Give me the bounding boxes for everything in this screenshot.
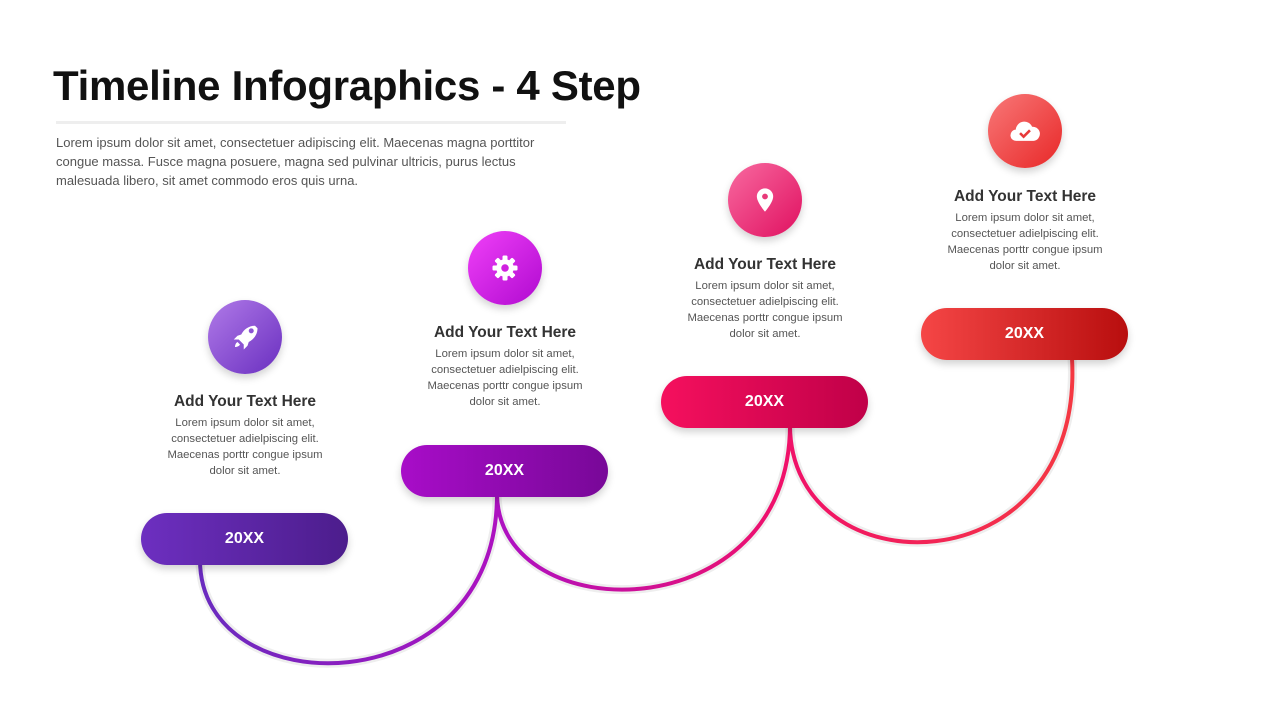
text: step 2: Add Your Text Here xyxy=(434,324,576,341)
intro paragraph: Lorem ipsum dolor sit amet, consectetuer adipiscing elit. Maecenas magna porttitor congue massa. Fusce magna posuere, magna sed pulvinar ultricis, purus lectus malesuada libero, sit amet commodo eros quis urna. xyxy=(56,135,534,188)
pill: step 4: 20XX xyxy=(1005,325,1044,342)
pill: step 1: 20XX xyxy=(225,530,264,547)
icon: gear xyxy=(468,231,542,305)
pill: step 3: 20XX xyxy=(745,393,784,410)
text: step 1: Add Your Text Here xyxy=(174,393,316,410)
text: step 4: Add Your Text Here xyxy=(954,188,1096,205)
pill: step 2 xyxy=(401,445,608,497)
icon: rocket xyxy=(208,300,282,374)
icon: location pin xyxy=(728,163,802,237)
pill: step 3 xyxy=(661,376,868,428)
text: step 3: Add Your Text Here xyxy=(694,256,836,273)
pill: step 1 xyxy=(141,513,348,565)
text: step 4: Lorem ipsum dolor sit amet, consectetuer adielpiscing elit. Maecenas porttr congue ipsum dolor sit amet. xyxy=(947,212,1103,272)
title: Timeline Infographics - 4 Step xyxy=(53,62,641,109)
icon: cloud check xyxy=(988,94,1062,168)
pill: step 4 xyxy=(921,308,1128,360)
text: step 3: Lorem ipsum dolor sit amet, consectetuer adielpiscing elit. Maecenas porttr congue ipsum dolor sit amet. xyxy=(687,280,843,340)
text: step 2: Lorem ipsum dolor sit amet, consectetuer adielpiscing elit. Maecenas porttr congue ipsum dolor sit amet. xyxy=(427,348,583,408)
text: step 1: Lorem ipsum dolor sit amet, consectetuer adielpiscing elit. Maecenas porttr congue ipsum dolor sit amet. xyxy=(167,417,323,477)
pill: step 2: 20XX xyxy=(485,462,524,479)
